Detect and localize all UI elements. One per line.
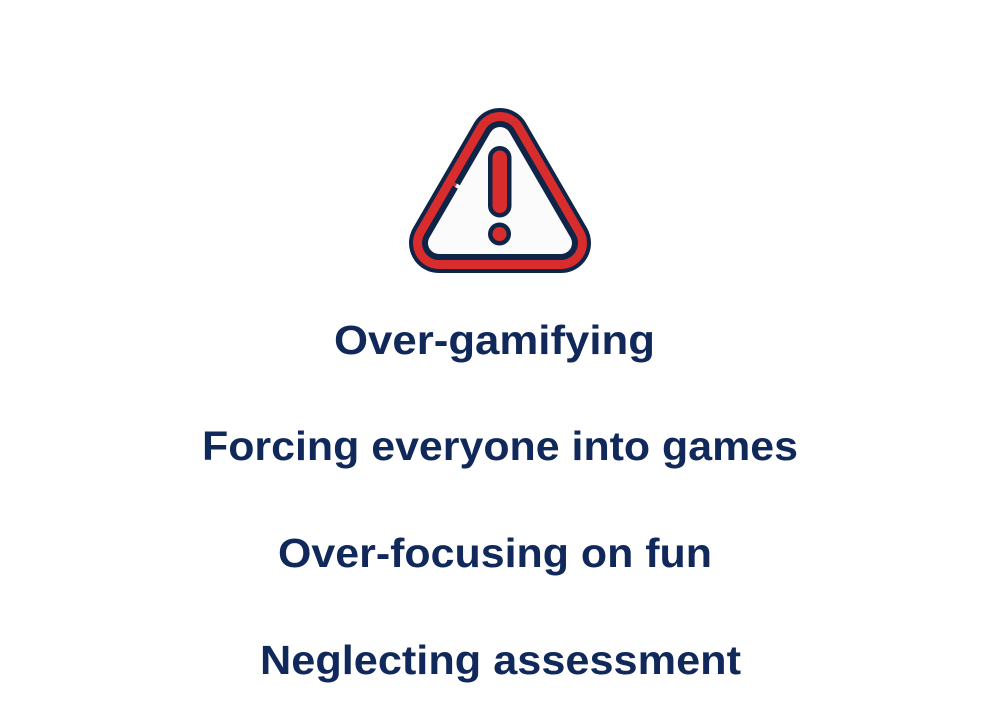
text: Over-gamifying: Over-gamifying <box>334 317 655 363</box>
icon: warning triangle <box>439 138 561 243</box>
text: Neglecting assessment: Neglecting assessment <box>260 637 741 683</box>
text: Forcing everyone into games: Forcing everyone into games <box>202 423 798 469</box>
text: Over-focusing on fun: Over-focusing on fun <box>278 530 712 576</box>
